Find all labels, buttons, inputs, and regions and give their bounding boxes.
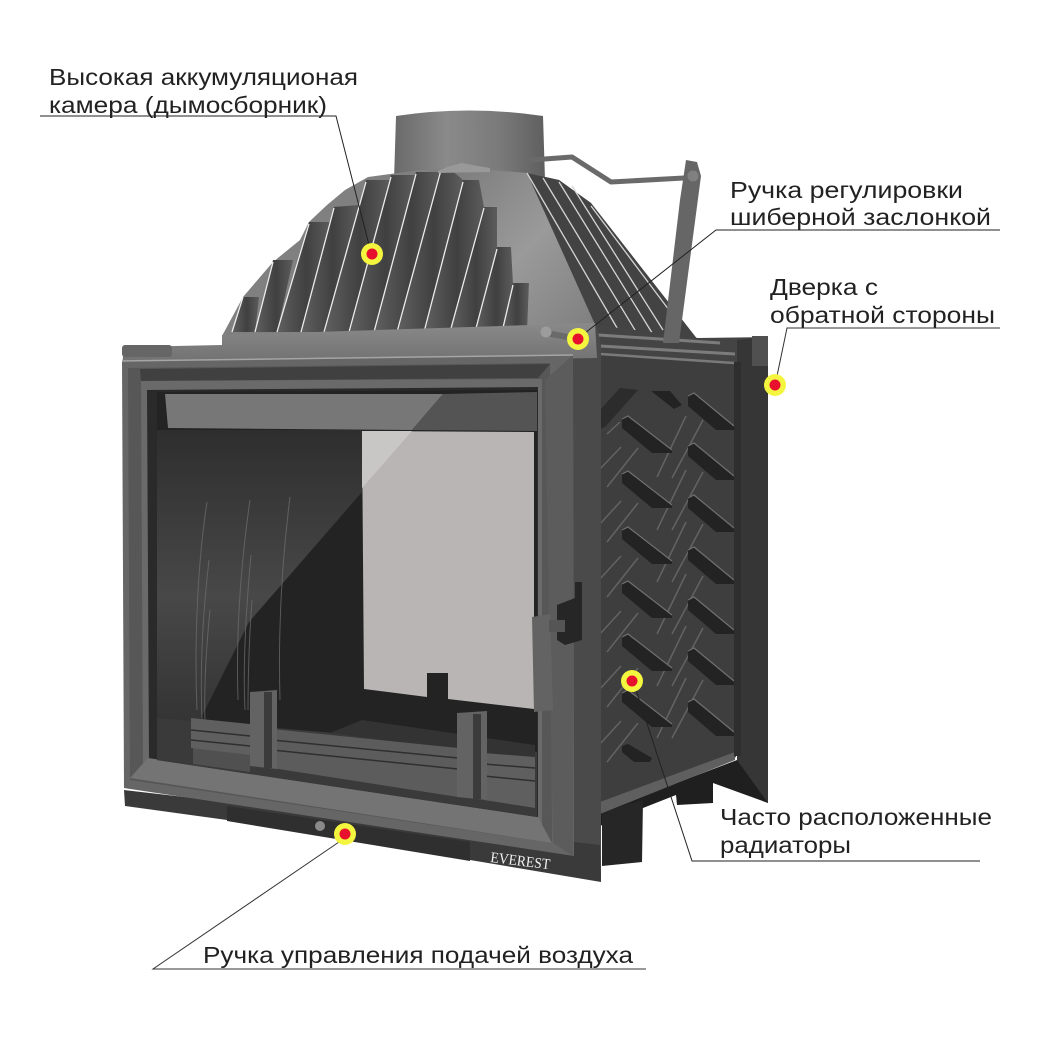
side rail detail <box>598 335 735 354</box>
label text: Ручка управления подачей воздуха <box>203 942 633 968</box>
handle link <box>549 620 565 632</box>
chimney collar <box>394 110 545 180</box>
dark firebox <box>158 760 536 817</box>
wall glare <box>362 431 412 488</box>
side panel rim <box>600 354 734 363</box>
grate lower left <box>193 748 250 772</box>
label line two: шиберной заслонкой <box>730 204 991 230</box>
air control knob <box>315 821 325 831</box>
firebox back floor <box>332 720 535 752</box>
heading text second line: камера (дымосборник) <box>49 92 327 118</box>
radiator fins <box>622 391 734 762</box>
side panel bottom lip <box>600 752 735 814</box>
grate rails middle <box>272 729 458 797</box>
firebox floor <box>157 728 537 817</box>
top plate lug <box>122 345 172 357</box>
heading text: Высокая аккумуляционая <box>49 64 358 90</box>
air control drawer <box>227 806 470 861</box>
callout: rear door <box>764 274 1000 396</box>
flue damper bracket <box>438 163 490 173</box>
door latch <box>557 582 582 645</box>
leader line <box>40 116 369 245</box>
marker <box>764 374 786 396</box>
damper rod <box>531 157 684 182</box>
leader line <box>636 690 980 861</box>
grate rails left <box>191 718 250 755</box>
door strip top <box>752 336 768 366</box>
top baffle shade <box>412 392 537 431</box>
front foot <box>602 800 643 866</box>
label line one: Ручка регулировки <box>730 177 963 203</box>
label line one: Дверка с <box>770 274 878 300</box>
andiron shade <box>268 692 477 799</box>
callout: air control <box>153 823 646 969</box>
andiron left <box>250 690 277 769</box>
top left dark plate <box>598 388 638 430</box>
hood body <box>222 167 698 340</box>
light firebox wall <box>362 431 534 709</box>
marker <box>621 670 643 692</box>
damper lever <box>663 160 701 343</box>
leader line <box>153 842 646 969</box>
front column <box>573 323 601 882</box>
callout: damper handle <box>567 177 1000 350</box>
label line one: Часто расположенные <box>720 804 992 830</box>
callout: radiators <box>621 670 992 861</box>
top baffle <box>165 394 443 430</box>
leader line <box>777 328 1000 376</box>
damper knob <box>540 326 578 339</box>
fireplace insert illustration <box>122 110 768 882</box>
grate rails right <box>484 753 535 808</box>
glass streaks <box>196 497 290 720</box>
label line two: радиаторы <box>720 832 851 858</box>
door hinge column <box>734 362 741 756</box>
glare <box>157 430 362 800</box>
radiator grooves <box>599 416 703 762</box>
marker <box>334 823 356 845</box>
top plate <box>122 323 597 366</box>
glass window <box>157 390 539 820</box>
leader line <box>585 230 1000 333</box>
door handle <box>532 614 553 712</box>
underside and rear foot <box>600 760 768 826</box>
rear door strip <box>737 337 768 803</box>
andiron right <box>457 711 487 800</box>
marker <box>361 243 383 265</box>
marker <box>567 328 589 350</box>
side panel <box>598 355 736 812</box>
logo: EVEREST <box>490 850 551 873</box>
callout: accumulation chamber <box>40 64 383 265</box>
rail lines <box>191 730 535 781</box>
bottom plate <box>124 790 601 882</box>
label line two: обратной стороны <box>770 302 995 328</box>
side top rail <box>596 325 768 368</box>
door frame <box>122 355 574 856</box>
